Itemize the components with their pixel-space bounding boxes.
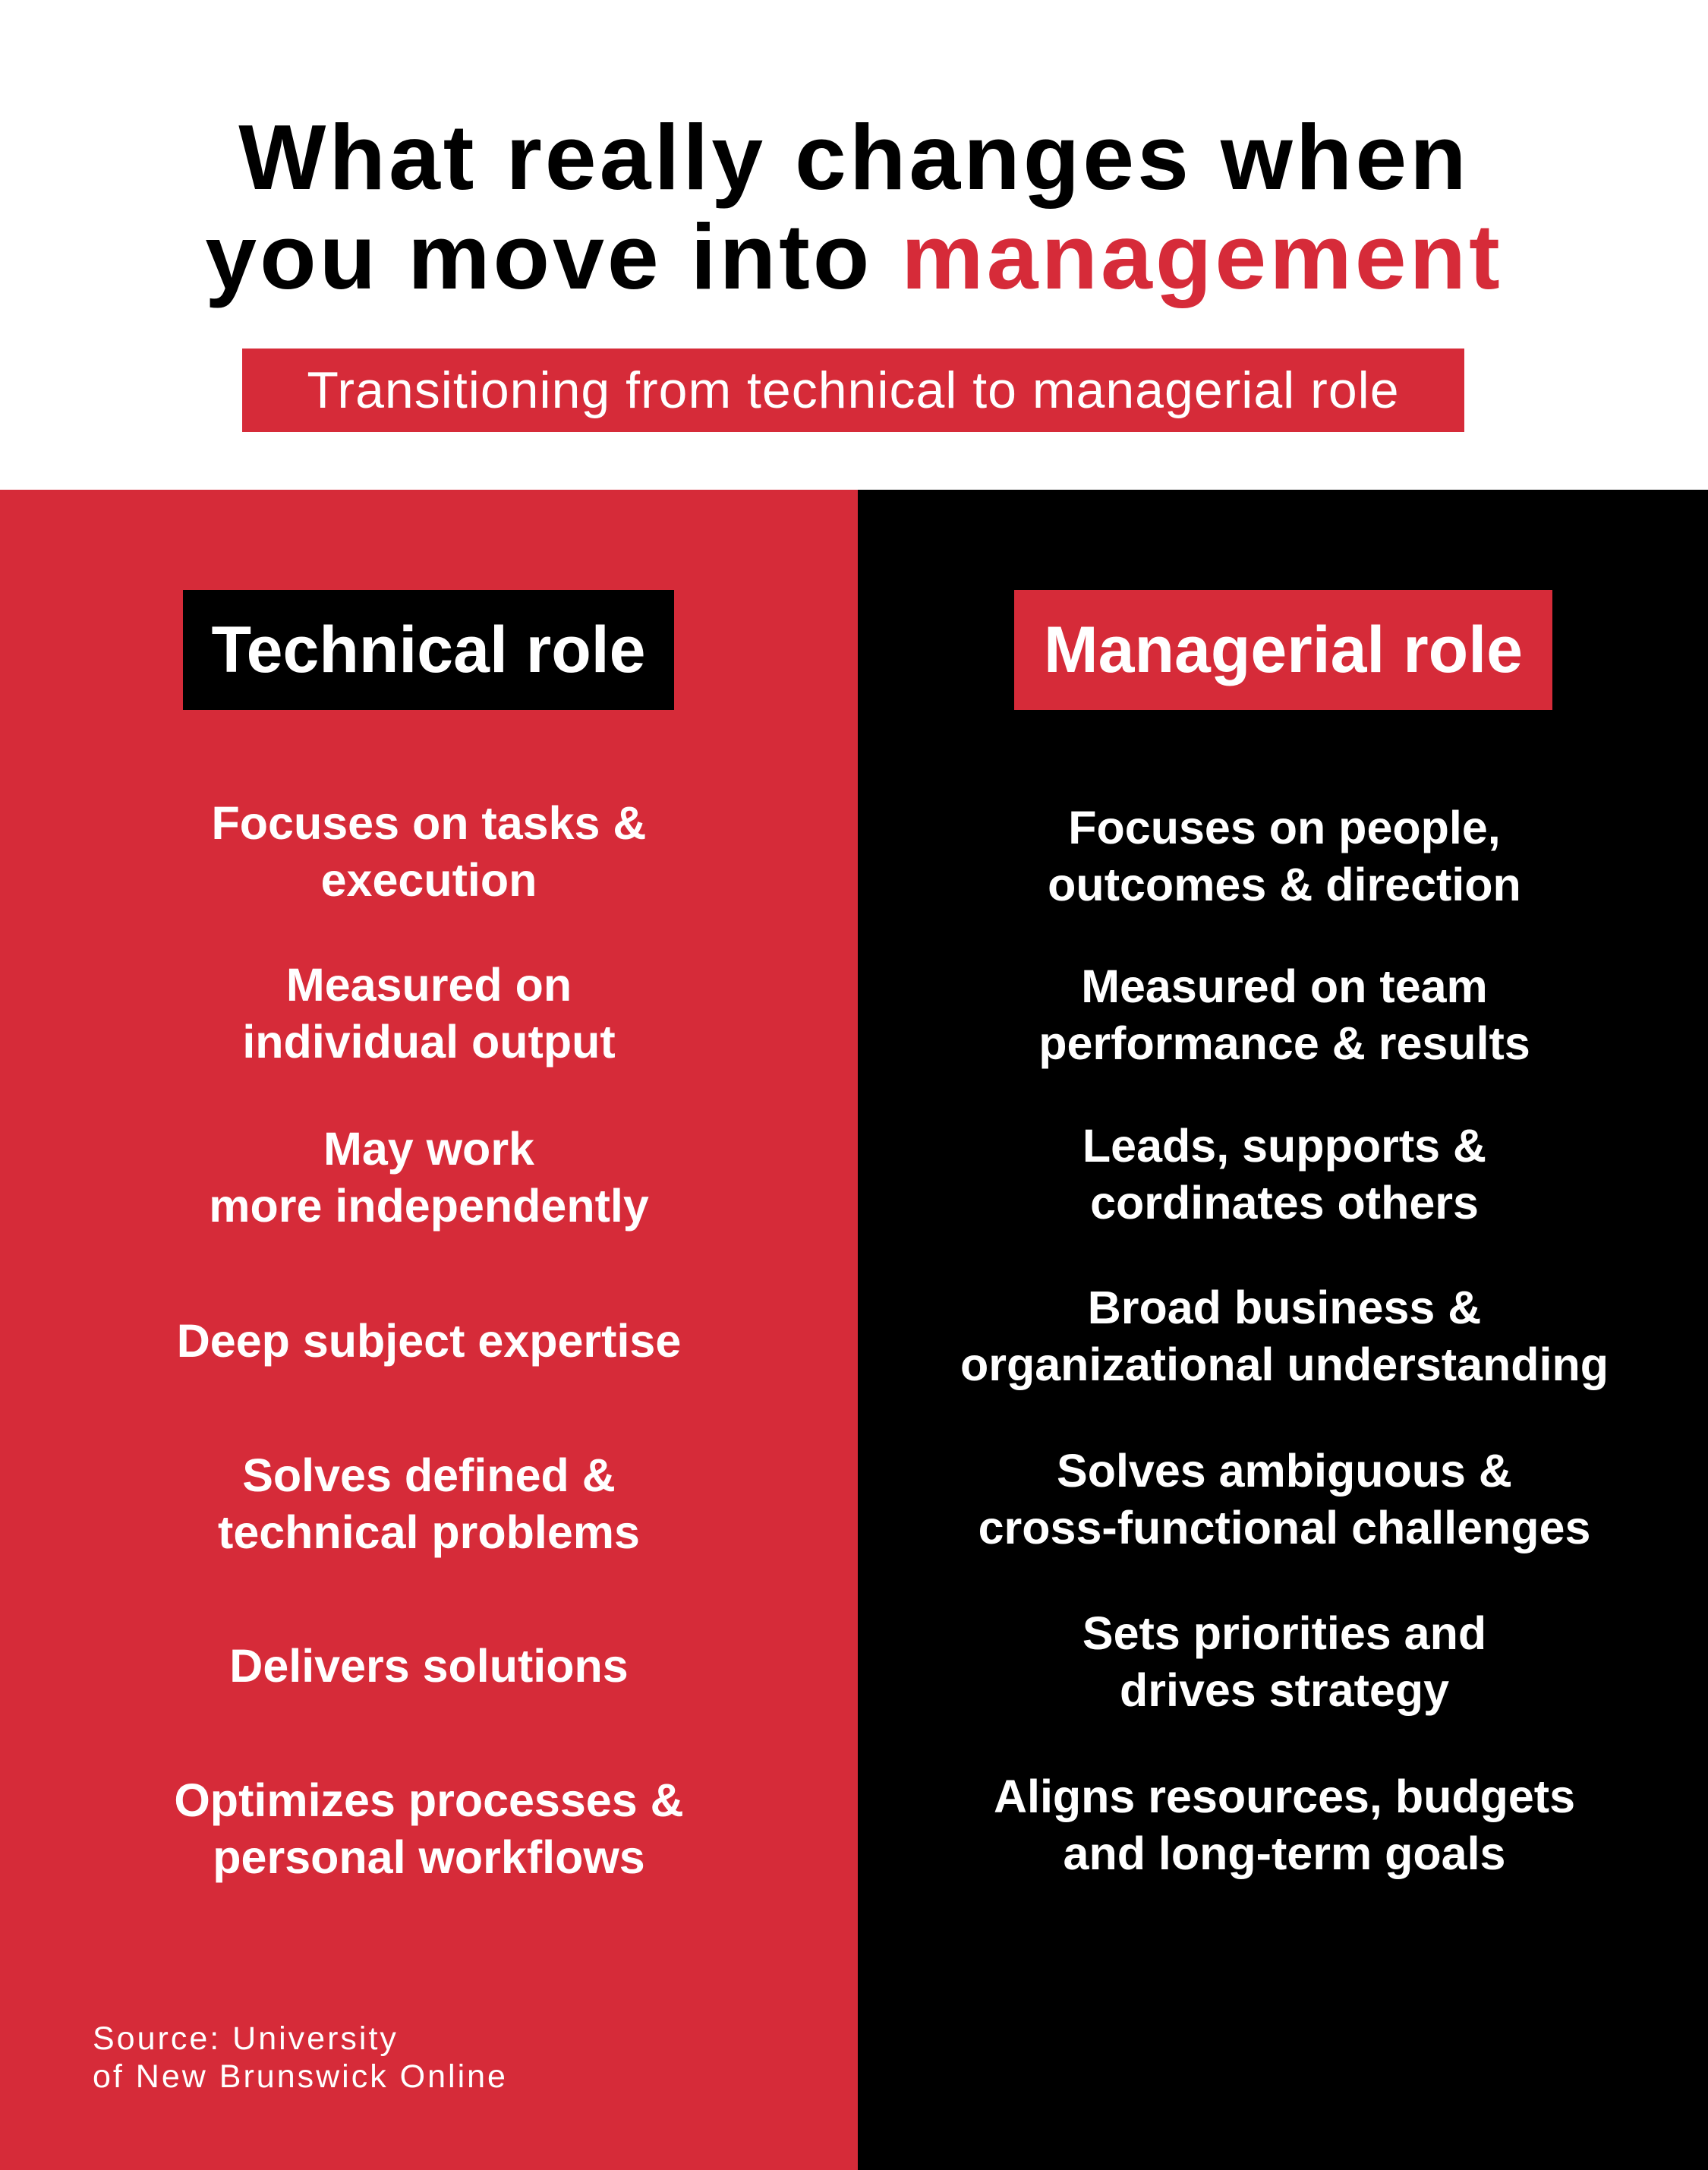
technical item 1 [212,797,646,906]
technical item 5: technical problems [218,1506,640,1558]
managerial item 6: drives strategy [1120,1664,1449,1716]
source note: Source: University [93,2020,399,2057]
technical item 3: more independently [209,1180,649,1232]
managerial item 6 [1082,1607,1486,1716]
technical item 7: Optimizes processes & [174,1774,684,1826]
panel: technical role [0,490,858,2170]
managerial item 1: outcomes & direction [1048,859,1521,910]
managerial item 5: cross-functional challenges [978,1502,1590,1553]
subtitle banner: Transitioning from technical to managerial role [307,361,1400,419]
technical item 2: individual output [242,1016,616,1068]
managerial item 1 [1048,802,1521,910]
technical item 6: Delivers solutions [229,1640,629,1692]
heading: technical role [183,590,674,710]
managerial item 3: cordinates others [1090,1177,1479,1229]
title [205,106,1503,308]
panel: managerial role [858,490,1708,2170]
managerial item 7: Aligns resources, budgets [994,1771,1575,1822]
managerial item 1: Focuses on people, [1068,802,1501,853]
managerial item 2: Measured on team [1081,960,1488,1012]
managerial item 4: Broad business & [1088,1282,1481,1333]
managerial item 2 [1038,960,1530,1069]
technical item 3 [209,1123,649,1232]
source note: of New Brunswick Online [93,2058,508,2095]
managerial item 4 [960,1282,1609,1390]
title: you move into management [205,205,1503,308]
technical item 4: Deep subject expertise [177,1315,681,1367]
technical item 1: Focuses on tasks & [212,797,646,849]
technical item 7: personal workflows [213,1831,645,1883]
managerial item 3 [1082,1120,1486,1229]
title: What really changes when [238,106,1470,209]
technical item 7 [174,1774,684,1883]
technical item 5 [218,1449,640,1558]
subtitle banner [242,349,1464,432]
source note [93,2020,508,2095]
heading: managerial role [1014,590,1552,710]
managerial item 7 [994,1771,1575,1879]
managerial item 2: performance & results [1038,1017,1530,1069]
managerial item 4: organizational understanding [960,1339,1609,1390]
heading: technical role: Technical role [212,613,645,686]
technical item 5: Solves defined & [242,1449,616,1501]
managerial item 5: Solves ambiguous & [1057,1445,1512,1497]
managerial item 6: Sets priorities and [1082,1607,1486,1659]
managerial item 7: and long-term goals [1064,1828,1505,1879]
technical item 2 [242,959,616,1068]
managerial item 3: Leads, supports & [1082,1120,1486,1172]
managerial item 5 [978,1445,1590,1553]
technical item 3: May work [323,1123,534,1175]
technical item 1: execution [321,854,537,906]
heading: managerial role: Managerial role [1044,613,1523,686]
technical item 2: Measured on [286,959,572,1011]
